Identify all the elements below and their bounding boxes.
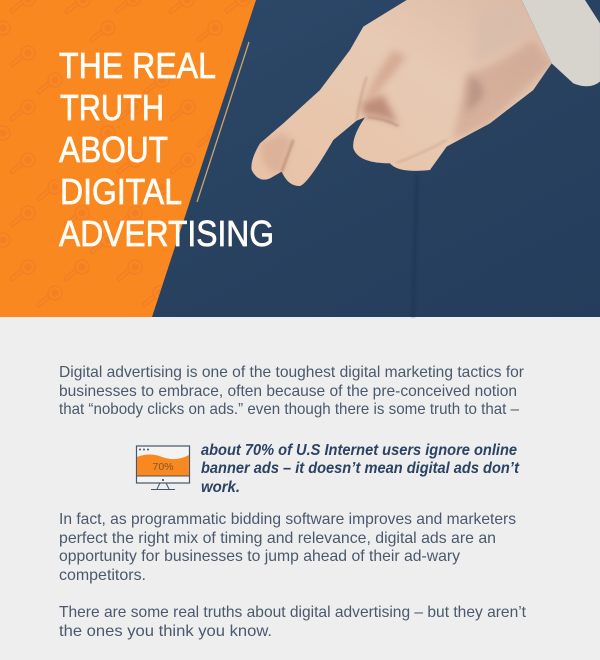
closing paragraph: There are some real truths about digital advertising – but they aren’t	[59, 604, 527, 621]
title	[59, 45, 274, 254]
callout text: work.	[201, 479, 240, 496]
title: DIGITAL	[60, 171, 182, 212]
callout text	[201, 442, 520, 496]
title: TRUTH	[60, 87, 164, 128]
icon: monitor 70%: 70%	[152, 461, 174, 473]
callout text: about 70% of U.S Internet users ignore online	[201, 442, 517, 459]
second paragraph	[59, 511, 516, 584]
icon: monitor 70%	[136, 446, 190, 490]
intro paragraph	[59, 364, 525, 418]
title: ABOUT	[59, 129, 168, 170]
second paragraph: In fact, as programmatic bidding software improves and marketers	[59, 511, 516, 528]
callout text: banner ads – it doesn’t mean digital ads don’t	[201, 460, 520, 477]
title: THE REAL	[59, 45, 216, 86]
key pattern	[0, 0, 250, 307]
intro paragraph: Digital advertising is one of the toughest digital marketing tactics for	[59, 364, 525, 381]
closing paragraph	[59, 604, 527, 640]
second paragraph: competitors.	[59, 567, 146, 584]
intro paragraph: businesses to embrace, often because of the pre-conceived notion	[59, 383, 517, 400]
title: ADVERTISING	[59, 213, 274, 254]
intro paragraph: that “nobody clicks on ads.” even though there is some truth to that –	[59, 401, 519, 418]
second paragraph: opportunity for businesses to jump ahead of their ad-wary	[59, 548, 460, 565]
crossed fingers hand	[251, 0, 552, 186]
second paragraph: perfect the right mix of timing and relevance, digital ads are an	[59, 530, 496, 547]
shirt cuff	[522, 0, 600, 86]
hero photo panel	[152, 0, 600, 318]
closing paragraph: the ones you think you know.	[59, 623, 272, 640]
orange diagonal panel	[0, 0, 256, 317]
jacket seam	[413, 175, 417, 317]
accent diagonal line	[197, 42, 249, 202]
